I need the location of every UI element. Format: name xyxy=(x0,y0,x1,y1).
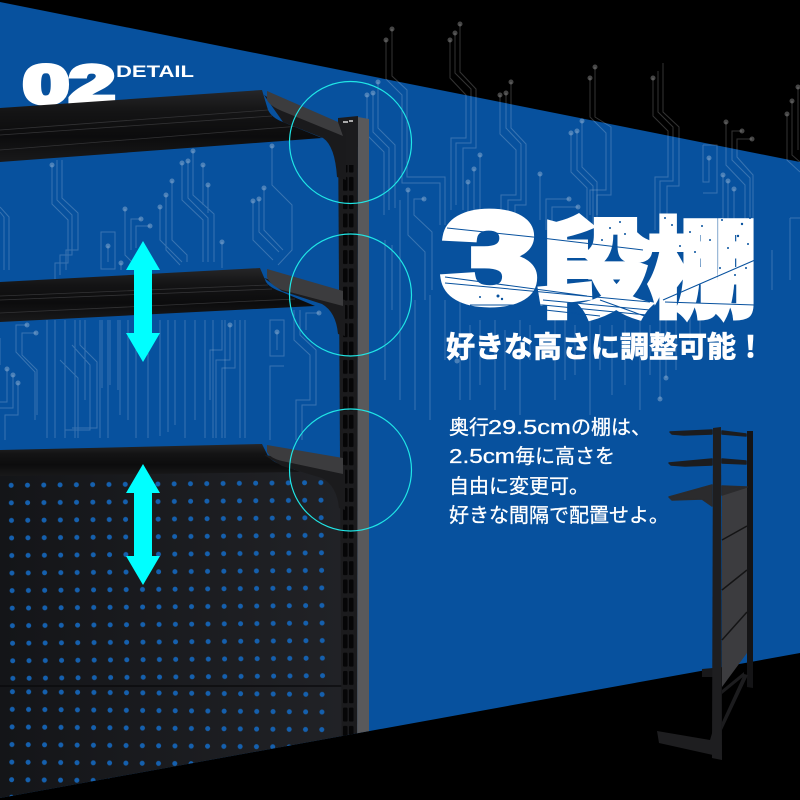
circuit board pattern xyxy=(0,22,800,440)
bracket 3 xyxy=(264,445,345,510)
highlight circle: middle bracket xyxy=(290,234,412,356)
front upright xyxy=(712,427,722,760)
body line 4: 好きな間隔で配置せよ。 xyxy=(449,504,669,527)
brace bars xyxy=(722,672,748,730)
bracket 1 xyxy=(264,91,346,180)
bracket 2 xyxy=(264,269,345,336)
lower shelf xyxy=(669,485,747,506)
pegboard holes lower xyxy=(9,689,325,796)
rear upright xyxy=(747,431,753,688)
heading glyphs xyxy=(442,187,758,331)
body text xyxy=(449,416,669,527)
heading: 3段棚 xyxy=(442,187,758,331)
heading speckles xyxy=(479,213,751,300)
highlight circle: top bracket xyxy=(290,82,412,204)
upper shelf xyxy=(670,430,746,436)
arrow: upper double-headed xyxy=(126,241,160,362)
shelf 3 xyxy=(0,444,300,476)
body line 2: 2.5cm xyxy=(449,446,515,468)
logo number: 02 xyxy=(23,55,115,115)
subheading: 好きな高さに調整可能！ xyxy=(446,331,765,364)
logo: 02 DETAIL xyxy=(23,55,194,115)
product thumbnail: side view of rack xyxy=(657,427,753,760)
upright post xyxy=(338,116,369,800)
arrow: lower double-headed xyxy=(126,464,160,585)
body line 3: 自由に変更可。 xyxy=(449,475,589,498)
body line 2: 毎に高さを xyxy=(515,445,615,468)
shelf 1 xyxy=(0,90,322,162)
pegboard seam xyxy=(0,686,342,687)
pegboard holes upper xyxy=(0,476,332,686)
rear foot xyxy=(702,668,713,677)
heading glyphs: 段 xyxy=(538,210,652,331)
front foot xyxy=(657,730,713,755)
body line 2 xyxy=(449,445,615,468)
body line 1: 29.5cm xyxy=(488,417,571,439)
body line 1: 奥行 xyxy=(449,416,489,439)
logo word: DETAIL xyxy=(116,62,194,81)
body line 1 xyxy=(449,416,651,439)
middle shelf xyxy=(669,459,746,466)
pegboard xyxy=(0,470,342,800)
panel seams xyxy=(722,526,747,640)
body line 1: の棚は、 xyxy=(571,416,651,439)
heading glyphs: 3 xyxy=(442,187,538,330)
highlight circle: lower bracket xyxy=(290,409,412,531)
heading glyphs: 棚 xyxy=(648,210,758,331)
main rack photo xyxy=(0,90,369,800)
heading cracks xyxy=(445,228,755,318)
side panel xyxy=(722,487,747,687)
shelf 2 xyxy=(0,268,315,322)
